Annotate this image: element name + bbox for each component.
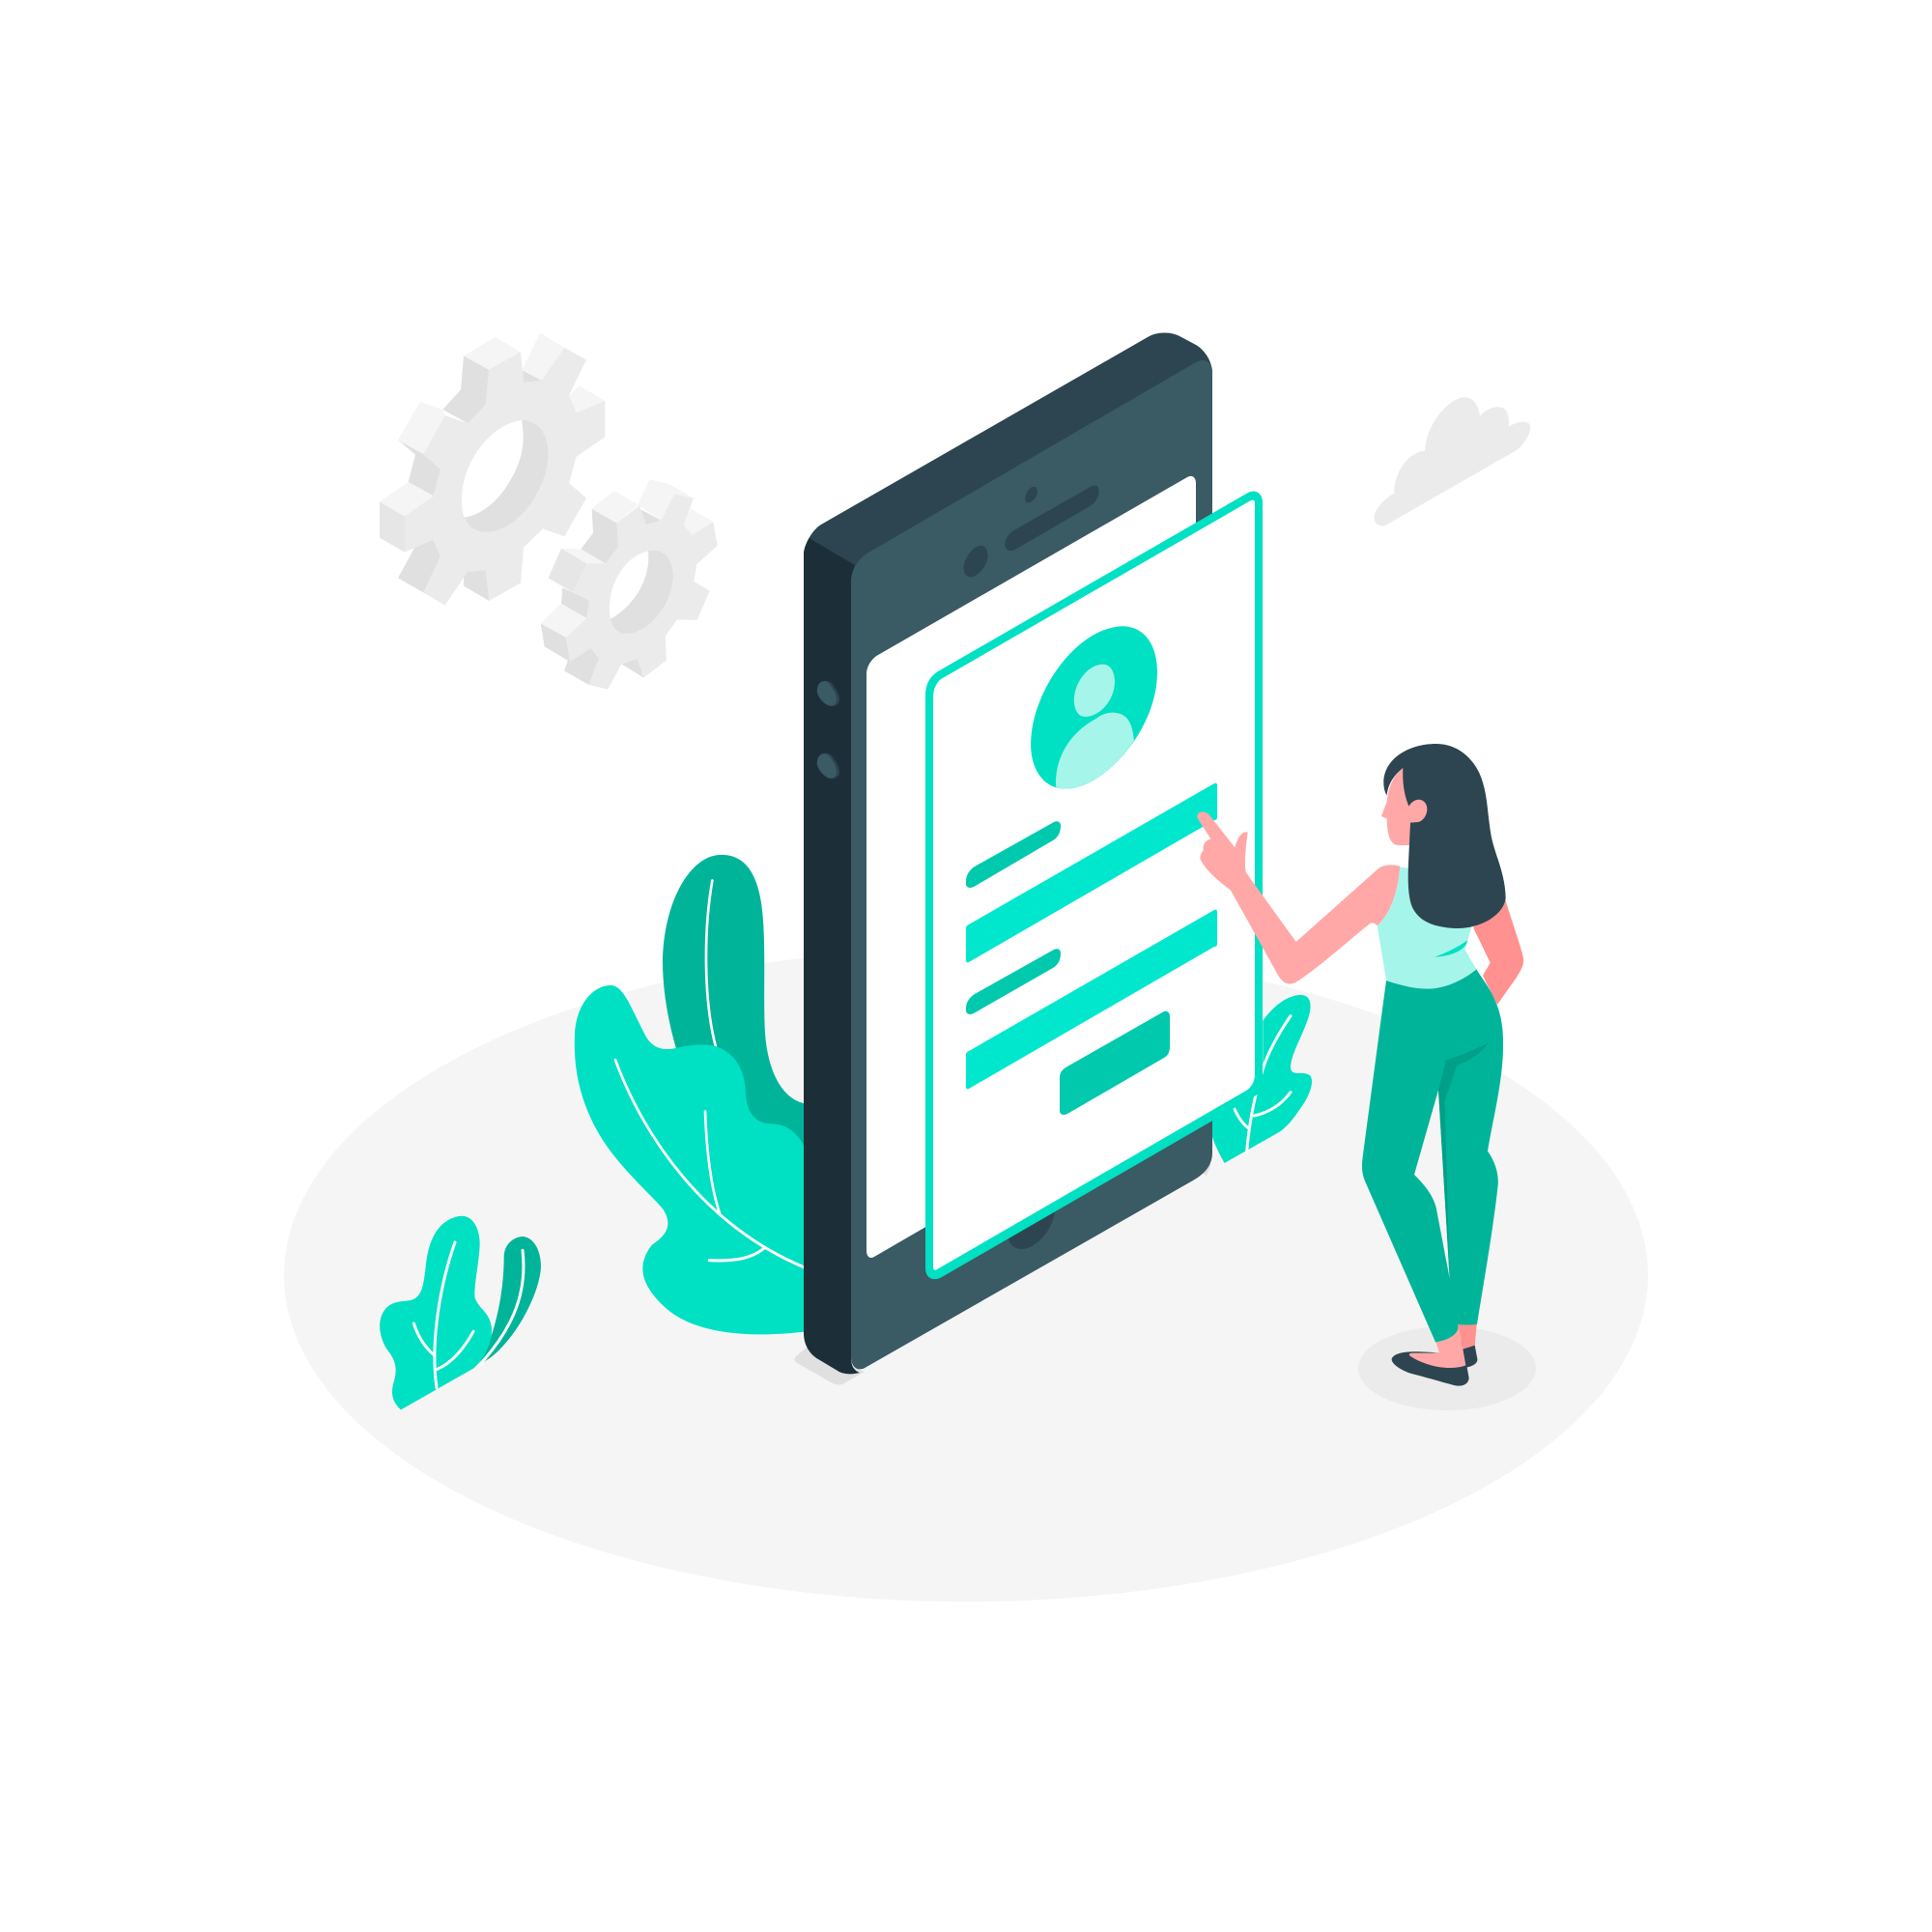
legs and feet <box>1362 969 1503 1386</box>
cloud <box>1375 397 1530 526</box>
plant: small left <box>380 1216 541 1409</box>
plant: small right behind phone <box>1212 995 1312 1163</box>
avatar <box>1031 626 1157 789</box>
back arm <box>1473 900 1523 1005</box>
form label bar 2 <box>966 949 1061 1014</box>
shoe shadow <box>1358 1326 1536 1410</box>
profile card <box>925 492 1263 1279</box>
form label bar 1 <box>966 821 1061 888</box>
phone: top edge <box>804 332 1212 676</box>
tank top <box>1378 867 1476 989</box>
large gear <box>380 333 605 606</box>
phone <box>804 332 1212 1374</box>
phone: screen <box>867 476 1196 1258</box>
card interior <box>933 500 1255 1270</box>
raised arm and pointing hand <box>1197 811 1400 984</box>
plant: large behind phone <box>575 855 805 1334</box>
card border <box>925 492 1263 1279</box>
head and hair <box>1381 744 1506 928</box>
phone: side buttons <box>817 681 839 779</box>
form input bar 1 <box>966 783 1217 962</box>
phone: home button <box>1008 1205 1056 1249</box>
submit button <box>1060 1011 1170 1115</box>
woman <box>1197 744 1523 1386</box>
form input bar 2 <box>966 910 1217 1089</box>
small gear <box>541 479 718 690</box>
floor ellipse <box>284 949 1648 1602</box>
phone: earpiece and cameras <box>964 486 1099 577</box>
phone: side edge <box>804 538 860 1374</box>
phone shadow <box>795 1164 1211 1385</box>
phone: front face <box>851 360 1212 1369</box>
